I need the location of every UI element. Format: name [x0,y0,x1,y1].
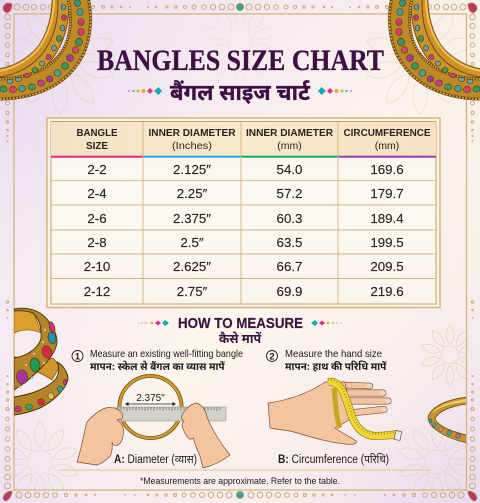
table rows: 2-6 [87,211,107,226]
title ornament left [128,87,162,95]
heading ornament right [311,320,342,326]
measured bangle [118,374,183,440]
how to measure heading: HOW TO MEASURE [178,315,303,332]
step 1 number [72,350,83,362]
measure panel base line [60,469,431,471]
hindi title: बैंगल साइज चार्ट [170,80,311,109]
left hand [77,408,124,465]
upper bangle [14,308,57,390]
step 2 number: 2 [269,352,275,362]
table grid [51,122,436,304]
hand [268,382,391,444]
dimension label: 2.375" [136,393,165,404]
table header: CIRCUMFERENCE [344,127,430,139]
table header: (mm) [375,140,399,152]
table rows: 179.7 [370,186,404,201]
table rows [84,162,404,299]
ruler [116,407,226,421]
circumference illustration [268,380,402,444]
right hand [182,403,230,468]
table header: INNER DIAMETER [148,127,236,139]
table rows: 2.625″ [173,259,211,274]
table rows: 2.75″ [177,284,208,299]
diameter caption: A: Diameter (व्यास) [114,454,197,466]
step 2 english text: Measure the hand size [285,348,382,360]
table rows: 2.25″ [177,186,208,201]
table rows: 2-10 [84,259,110,274]
table rows: 63.5 [277,235,302,250]
table rows: 189.4 [370,211,404,226]
hindi subheading: कैसे मापें [219,331,262,349]
table rows: 199.5 [370,235,404,250]
table rows: 2-8 [87,235,107,250]
table rows: 69.9 [277,284,302,299]
title: BANGLES SIZE CHART [97,45,384,77]
step 1 number: 1 [75,352,80,362]
bottom-left bangles [14,308,68,415]
table rows: 54.0 [277,162,302,177]
title ornament right [318,87,352,95]
table rows: 2-12 [84,284,110,299]
top-right bangles [396,0,480,93]
table header [51,122,436,158]
table rows: 209.5 [370,259,404,274]
table rows: 60.3 [277,211,302,226]
table rows: 66.7 [277,259,302,274]
table header: INNER DIAMETER [246,127,333,139]
table rows: 2-2 [87,162,107,177]
heading ornament left [138,320,169,326]
step 2 number [266,350,278,362]
diameter illustration [77,374,230,468]
table rows: 219.6 [370,284,404,299]
table header: (Inches) [172,140,212,152]
step 1 hindi text: मापन: स्केल से बैंगल का व्यास मापें [90,360,226,375]
measuring tape [328,380,402,441]
lower bangle [14,357,68,415]
footnote: *Measurements are approximate. Refer to the table. [140,476,340,487]
circumference caption: B: Circumference (परिधि) [278,453,389,466]
table rows: 2-4 [87,186,107,201]
dimension arrow [125,402,176,406]
bottom-right bangle [428,397,467,443]
table rows: 2.5″ [180,235,204,250]
table header: SIZE [86,140,108,152]
table rows: 169.6 [370,162,404,177]
step 2 hindi text: मापन: हाथ की परिधि मापें [285,361,387,375]
table header: (mm) [277,140,302,152]
table rows: 57.2 [277,186,302,201]
table rows: 2.375″ [173,211,211,226]
size table [47,118,440,308]
top-left bangles [0,0,84,93]
table rows: 2.125″ [173,162,211,177]
step 1 english text: Measure an existing well-fitting bangle [90,348,243,360]
table header: BANGLE [76,127,118,139]
